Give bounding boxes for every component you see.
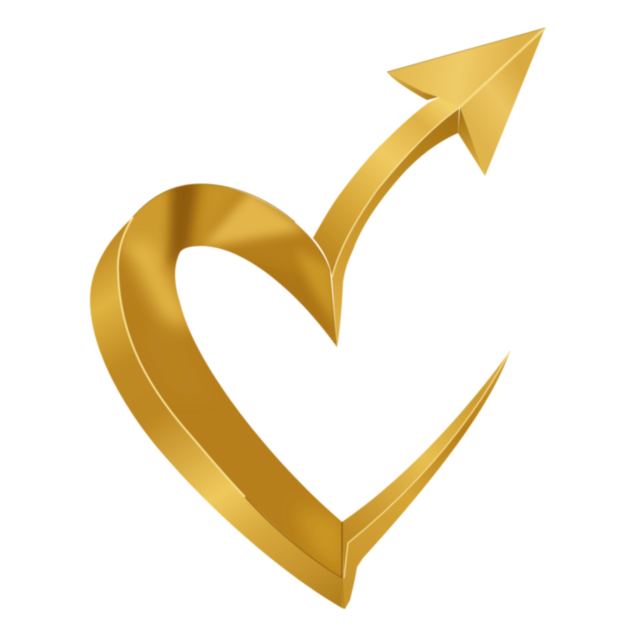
lower tail of heart xyxy=(342,351,510,609)
upper shaft face xyxy=(313,97,460,277)
sheen streaks on the band xyxy=(120,178,345,575)
front band of heart xyxy=(118,178,345,578)
arrowhead xyxy=(387,28,545,176)
tail lower face xyxy=(342,351,510,609)
arrow shaft xyxy=(313,97,460,348)
icon: golden heart arrow xyxy=(89,26,546,610)
tail upper face xyxy=(342,351,510,578)
front band base shape xyxy=(118,184,342,578)
centre ridge xyxy=(460,28,545,107)
left wing underside xyxy=(387,72,438,100)
dark fold line xyxy=(341,522,343,578)
upper face xyxy=(387,28,545,107)
inner face xyxy=(458,107,485,176)
dark lower edge line xyxy=(245,497,342,578)
right face xyxy=(460,28,545,176)
shaft ridge highlight xyxy=(332,108,459,277)
rear band of heart xyxy=(90,217,344,608)
lower shaft face xyxy=(332,108,459,348)
thin top edge xyxy=(133,184,295,222)
bright edge line between bands xyxy=(118,217,245,497)
tail ridge highlight xyxy=(344,351,510,578)
top edge xyxy=(387,28,545,72)
lower fold line xyxy=(342,578,344,608)
